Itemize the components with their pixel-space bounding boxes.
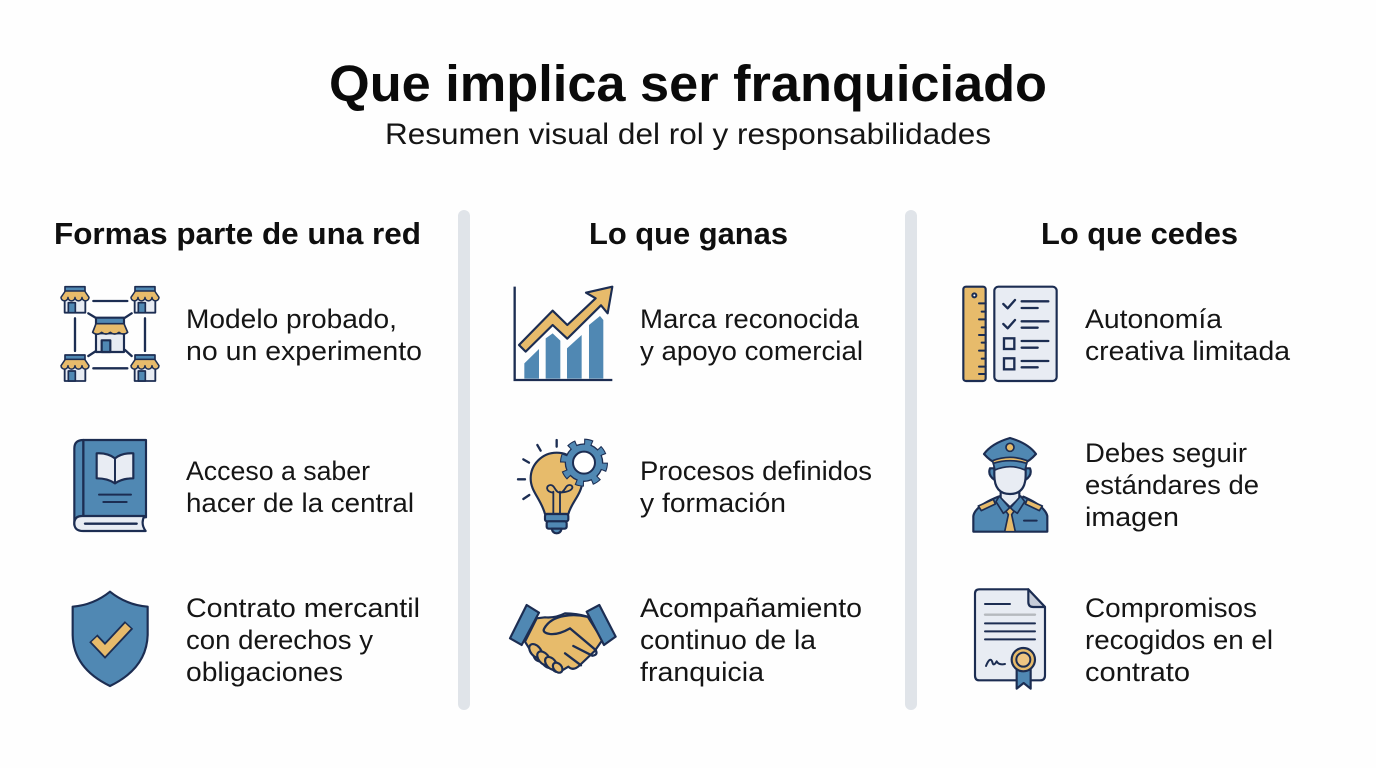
text: estándares de imagen (1085, 438, 1259, 532)
icon: contract with seal (975, 589, 1045, 689)
icon: light bulb with gear (518, 440, 604, 533)
text: marca reconocida: y apoyo comercial (640, 336, 863, 366)
text: procesos definidos: y formación (640, 488, 786, 518)
text: acceso a saber hacer (186, 456, 414, 518)
panel: lo que ganas (510, 216, 872, 687)
text: compromisos (1085, 593, 1273, 687)
text: acompañamiento: franquicia (640, 657, 765, 687)
icon: handshake (510, 605, 616, 675)
text: acceso a saber hacer: hacer de la central (186, 488, 414, 518)
text: procesos definidos (640, 456, 872, 518)
panel: lo que cedes (963, 216, 1291, 689)
text: modelo probado: no un experimento (186, 336, 422, 366)
heading: lo que ganas: Lo que ganas (589, 216, 788, 251)
item: acceso a saber hacer (74, 440, 414, 531)
heading: lo que cedes: Lo que cedes (1041, 216, 1238, 251)
item: marca reconocida (515, 287, 863, 380)
text: modelo probado: Modelo probado, (186, 304, 397, 334)
item: procesos definidos (518, 440, 872, 533)
text: compromisos: recogidos en el (1085, 625, 1273, 655)
text: contrato mercantil: Contrato mercantil (186, 593, 420, 623)
text: autonomía: Autonomía (1085, 304, 1223, 334)
text: autonomía (1085, 304, 1291, 366)
text: modelo probado (186, 304, 422, 366)
item: compromisos (975, 589, 1273, 689)
icon: book (74, 440, 146, 531)
icon: uniformed officer (973, 438, 1047, 532)
text: acompañamiento: continuo de la (640, 625, 817, 655)
text: contrato mercantil (186, 593, 420, 687)
text: marca reconocida: Marca reconocida (640, 304, 860, 334)
heading: formas parte de una red: Formas parte de una red (54, 216, 421, 251)
item: contrato mercantil (73, 592, 420, 687)
panel: formas parte de una red (54, 216, 422, 687)
icon: store network (61, 287, 159, 381)
text: estándares de imagen: Debes seguir (1085, 438, 1247, 468)
text: acompañamiento: Acompañamiento (640, 593, 862, 623)
text: marca reconocida (640, 304, 863, 366)
item: estándares de imagen (973, 438, 1259, 532)
text: estándares de imagen: imagen (1085, 502, 1179, 532)
text: acceso a saber hacer: Acceso a saber (186, 456, 370, 486)
item: autonomía (963, 287, 1291, 381)
item: acompañamiento (510, 593, 862, 687)
item: modelo probado (61, 287, 422, 381)
text: procesos definidos: Procesos definidos (640, 456, 872, 486)
title: Que implica ser franquiciado (329, 55, 1047, 112)
text: acompañamiento (640, 593, 862, 687)
text: estándares de imagen: estándares de (1085, 470, 1259, 500)
text: compromisos: contrato (1085, 657, 1190, 687)
icon: growth chart (515, 287, 612, 380)
text: autonomía: creativa limitada (1085, 336, 1291, 366)
text: contrato mercantil: con derechos y (186, 625, 374, 655)
icon: ruler and checklist (963, 287, 1057, 381)
text: contrato mercantil: obligaciones (186, 657, 343, 687)
text: compromisos: Compromisos (1085, 593, 1257, 623)
icon: shield with check (73, 592, 148, 686)
subtitle: Resumen visual del rol y responsabilidades (385, 118, 991, 151)
